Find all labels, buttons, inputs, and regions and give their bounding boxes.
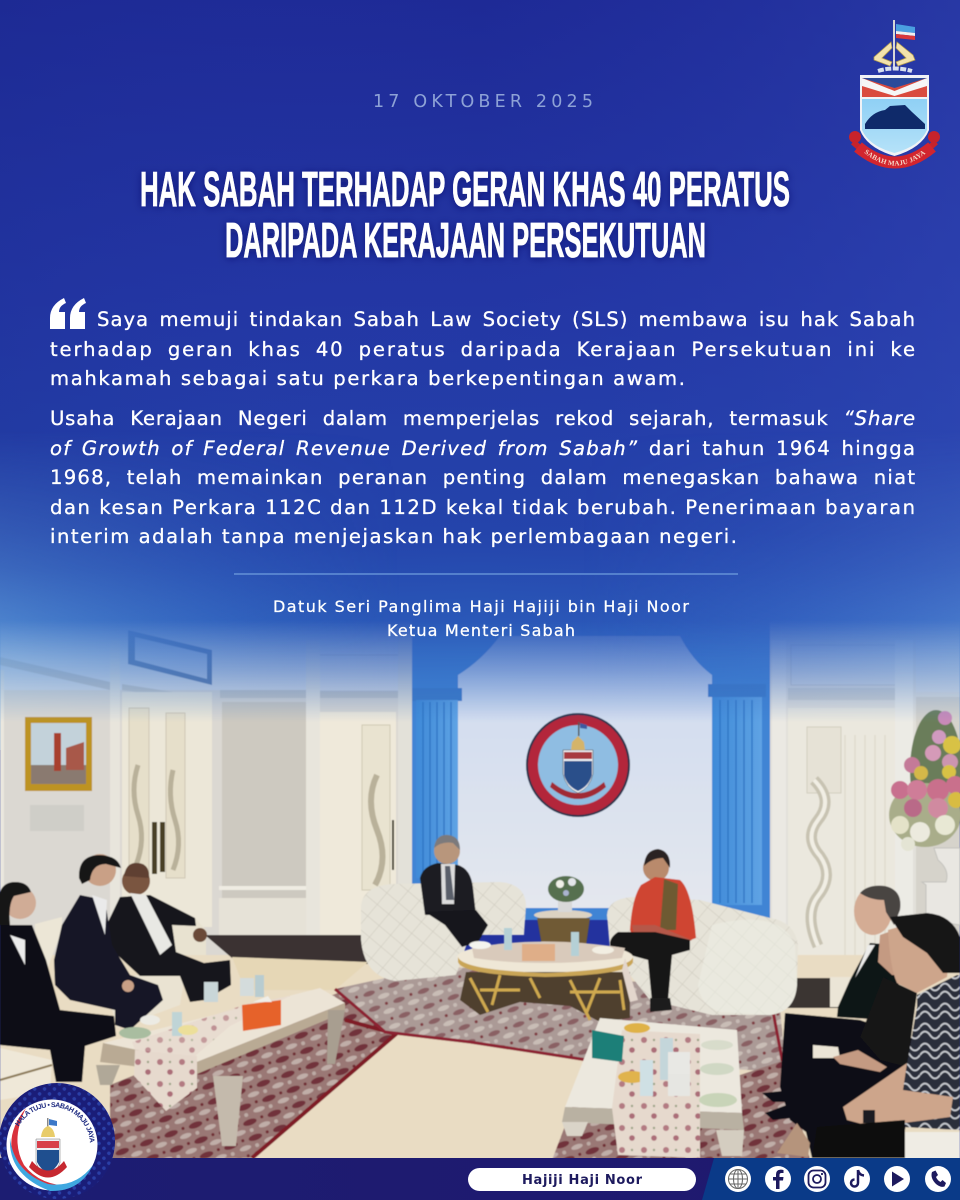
man at back xyxy=(108,863,231,1002)
paragraph one: terhadap geran khas 40 peratus daripada Kerajaan Persekutuan ini ke xyxy=(50,338,915,361)
sofa at left xyxy=(0,917,206,1100)
side wall panel xyxy=(222,702,306,898)
paragraph two: dan kesan Perkara 112C dan 112D kekal tidak berubah. Penerimaan bayaran xyxy=(50,496,915,519)
icon: youtube play xyxy=(884,1166,910,1192)
badge swoosh xyxy=(11,1108,72,1187)
paragraph two: Usaha Kerajaan Negeri dalam memperjelas rekod sejarah, termasuk “Share xyxy=(50,407,915,430)
paragraph two: 1968, telah memainkan peranan penting dalam menegaskan bahawa niat xyxy=(50,466,915,489)
dark trousers backing xyxy=(780,1013,917,1158)
icon: instagram xyxy=(804,1166,830,1192)
right sofa xyxy=(607,897,798,1015)
left sofa xyxy=(361,882,526,981)
badge: Hala Tuju emblem xyxy=(0,1083,115,1199)
attribution: Datuk Seri Panglima Haji Hajiji bin Haji Noor xyxy=(273,597,689,616)
centre-right man xyxy=(610,849,696,1012)
shield xyxy=(860,75,929,156)
motto ribbon: SABAH MAJU JAYA xyxy=(864,150,926,166)
painting xyxy=(25,717,92,791)
flag and pole xyxy=(893,20,915,68)
icon: globe xyxy=(725,1166,751,1192)
right seated group xyxy=(762,886,960,1159)
arms holding pole xyxy=(874,42,915,66)
left blue pillar xyxy=(412,688,462,878)
rug by door xyxy=(232,957,368,990)
side door xyxy=(306,640,412,940)
badge ring text: HALA TUJU • SABAH MAJU JAYA xyxy=(14,1102,94,1143)
attribution: Ketua Menteri Sabah xyxy=(387,621,575,640)
quote body text xyxy=(50,308,915,548)
icon: phone xyxy=(925,1166,951,1192)
cream floor base xyxy=(0,955,960,1165)
paragraph two: interim adalah tanpa menjejaskan hak perlembagaan negeri. xyxy=(50,525,737,548)
right blue pillar xyxy=(708,684,766,905)
flower arrangement xyxy=(889,710,960,925)
wreath xyxy=(878,68,912,71)
woman xyxy=(0,882,116,1082)
date: 17 OKTOBER 2025 xyxy=(373,92,593,112)
badge crest xyxy=(29,1118,67,1178)
crest: Sabah coat of arms xyxy=(849,20,940,168)
left coffee table xyxy=(96,975,345,1146)
sofa front right xyxy=(905,1132,960,1159)
woman xyxy=(765,928,917,1120)
left carpet xyxy=(110,990,396,1160)
motto ribbon xyxy=(849,131,940,168)
paragraph one: mahkamah sebagai satu perkara berkepentingan awam. xyxy=(50,367,685,390)
paragraph one xyxy=(50,308,915,390)
man with glasses xyxy=(762,886,900,1102)
pedestal vase xyxy=(922,848,960,925)
light switches xyxy=(30,805,84,831)
title xyxy=(140,163,790,268)
alcove blue wall xyxy=(411,642,771,921)
icon: quotation mark xyxy=(50,298,86,329)
footer bar xyxy=(0,1158,960,1200)
name pill xyxy=(468,1168,696,1191)
right wall xyxy=(769,625,960,956)
paragraph two: of Growth of Federal Revenue Derived from Sabah” dari tahun 1964 hingga xyxy=(50,437,915,460)
white arch xyxy=(458,636,712,908)
left seated group xyxy=(0,854,231,1100)
name pill: Hajiji Haji Noor xyxy=(522,1173,643,1188)
man in batik shirt xyxy=(777,913,960,1158)
man in middle xyxy=(54,854,163,1030)
side table with flowers xyxy=(534,876,592,946)
icon: facebook xyxy=(765,1166,791,1192)
right coffee table xyxy=(562,1018,744,1158)
double doors xyxy=(122,692,212,927)
icon: tiktok xyxy=(844,1166,870,1192)
centre coffee table xyxy=(457,928,638,1022)
background xyxy=(0,0,960,750)
dark floor strip xyxy=(205,935,372,964)
attribution xyxy=(273,597,689,640)
plaque xyxy=(128,630,212,685)
upper wall mouldings xyxy=(0,663,398,916)
left wall xyxy=(3,689,399,956)
paragraph two xyxy=(50,407,915,548)
right lower carpet xyxy=(552,1060,810,1160)
centre carpet xyxy=(335,966,786,1072)
paragraph one: Saya memuji tindakan Sabah Law Society (SLS) membawa isu hak Sabah xyxy=(97,308,915,331)
wall emblem xyxy=(526,713,630,817)
centre-left man xyxy=(420,835,488,947)
photo: meeting room xyxy=(0,600,960,1165)
